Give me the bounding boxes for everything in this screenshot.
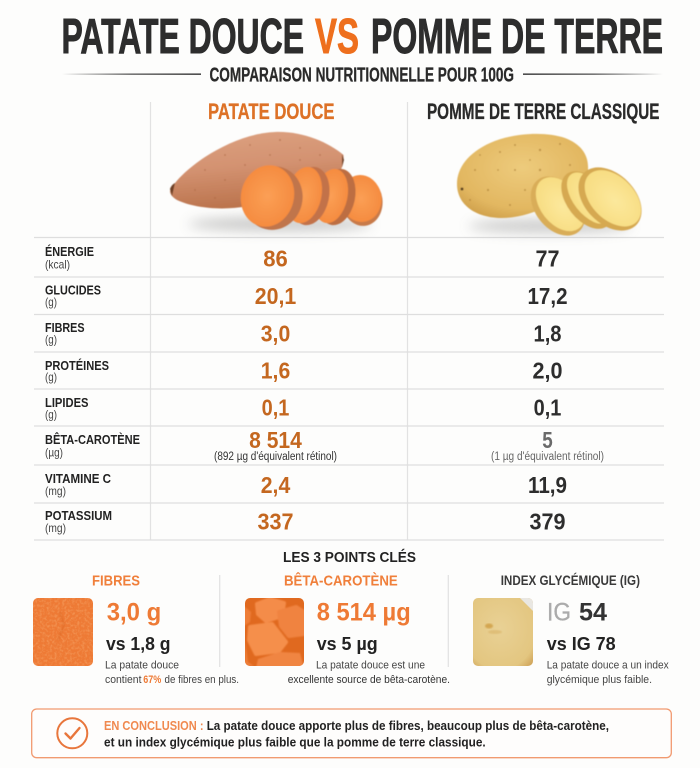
- row: potassium: [45, 508, 566, 535]
- row: énergie: (kcal): [45, 258, 70, 272]
- dividers between key points: [220, 575, 448, 667]
- row: énergie: ÉNERGIE: [45, 244, 94, 259]
- panel: index glycémique: INDEX GLYCÉMIQUE (IG): [501, 573, 640, 588]
- panel: bêta-carotène: [244, 572, 450, 686]
- panel: bêta-carotène: BÊTA-CAROTÈNE: [284, 572, 398, 590]
- table grid: [34, 102, 664, 540]
- illustration: sweet potato with slices: [170, 132, 386, 236]
- row: lipides: 0,1: [534, 394, 562, 420]
- row: bêta-carotène: 8 514: [249, 427, 302, 453]
- row: vitamine C: 2,4: [261, 472, 290, 498]
- row: énergie: [45, 244, 560, 272]
- panel: fibres: La patate douce: [105, 660, 179, 672]
- row: protéines: PROTÉINES: [45, 358, 109, 373]
- panel: bêta-carotène: excellente source de bêta-carotène.: [288, 674, 450, 686]
- row: bêta-carotène: (892 µg d'équivalent rétinol): [214, 451, 337, 463]
- row: lipides: 0,1: [262, 394, 290, 420]
- callout: conclusion: et un index glycémique plus faible que la pomme de terre classique.: [104, 735, 486, 750]
- panel: index glycémique: La patate douce a un index: [547, 660, 669, 672]
- row: bêta-carotène: [45, 427, 604, 463]
- row: fibres: [45, 320, 562, 346]
- row: lipides: (g): [45, 408, 57, 422]
- callout: conclusion: EN CONCLUSION :: [104, 718, 204, 733]
- row: protéines: 2,0: [532, 358, 562, 384]
- main title: PATATE DOUCE: [62, 10, 304, 64]
- row: potassium: (mg): [45, 521, 66, 535]
- row: lipides: [45, 394, 562, 422]
- row: énergie: 86: [263, 246, 288, 272]
- row: fibres: FIBRES: [45, 320, 85, 335]
- row: glucides: [45, 282, 568, 309]
- row: glucides: 20,1: [255, 283, 296, 309]
- row: vitamine C: VITAMINE C: [45, 471, 112, 486]
- panel: fibres: de fibres en plus.: [164, 674, 239, 686]
- icon: check mark in circle: [57, 718, 87, 748]
- main title: VS: [315, 10, 359, 64]
- panel: index glycémique: 54: [579, 598, 607, 626]
- panel: fibres: [33, 572, 239, 686]
- illustration: potato with slices: [457, 134, 654, 246]
- row: potassium: 379: [530, 508, 566, 534]
- panel: bêta-carotène: La patate douce est une: [316, 660, 425, 672]
- panel: fibres: 67%: [143, 674, 161, 686]
- row: bêta-carotène: (µg): [45, 446, 63, 460]
- row: fibres: 3,0: [261, 320, 290, 346]
- row: bêta-carotène: BÊTA-CAROTÈNE: [45, 432, 140, 447]
- panel: bêta-carotène: 8 514 µg: [317, 598, 411, 626]
- row: vitamine C: [45, 471, 567, 498]
- panel: fibres: contient: [105, 674, 142, 686]
- row: glucides: (g): [45, 295, 57, 309]
- row: glucides: GLUCIDES: [45, 282, 101, 298]
- row: fibres: (g): [45, 332, 57, 346]
- row: vitamine C: (mg): [45, 484, 66, 498]
- row: protéines: (g): [45, 370, 57, 384]
- row: glucides: 17,2: [528, 283, 568, 309]
- row: protéines: 1,6: [261, 358, 290, 384]
- row: fibres: 1,8: [534, 320, 562, 346]
- row: potassium: 337: [258, 508, 294, 534]
- row: lipides: LIPIDES: [45, 395, 89, 410]
- column heading: patate douce: PATATE DOUCE: [208, 99, 334, 124]
- panel: fibres: 3,0 g: [107, 598, 161, 626]
- panel: fibres: vs 1,8 g: [106, 633, 170, 654]
- callout: conclusion: [32, 709, 671, 758]
- panel: index glycémique: vs IG 78: [547, 633, 616, 654]
- panel: index glycémique: [473, 573, 669, 686]
- heading: les 3 points clés: LES 3 POINTS CLÉS: [283, 549, 416, 566]
- main title: [62, 10, 663, 64]
- row: bêta-carotène: (1 µg d'équivalent rétinol): [491, 451, 604, 463]
- callout: conclusion: La patate douce apporte plus de fibres, beaucoup plus de bêta-carotène,: [207, 718, 609, 733]
- panel: fibres: FIBRES: [92, 572, 140, 590]
- row: protéines: [45, 358, 562, 384]
- row: potassium: POTASSIUM: [45, 508, 112, 523]
- panel: bêta-carotène: vs 5 µg: [317, 633, 378, 654]
- row: vitamine C: 11,9: [528, 472, 567, 498]
- row: bêta-carotène: 5: [542, 427, 553, 453]
- panel: index glycémique: IG: [547, 598, 571, 626]
- subtitle with rules: COMPARAISON NUTRITIONNELLE POUR 100G: [210, 64, 514, 86]
- row: énergie: 77: [536, 246, 560, 272]
- panel: index glycémique: glycémique plus faible.: [547, 674, 652, 686]
